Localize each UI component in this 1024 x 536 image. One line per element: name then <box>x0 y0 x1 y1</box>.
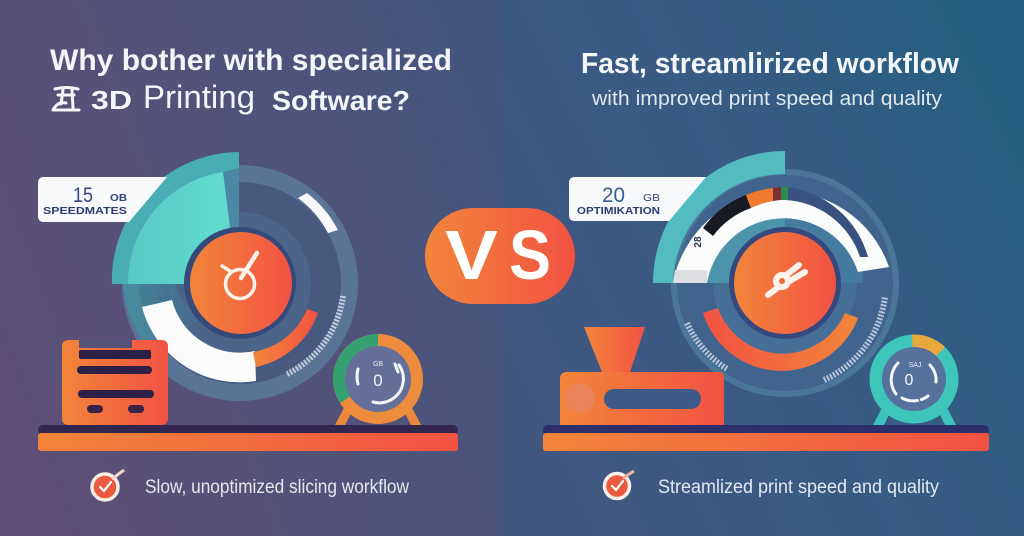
white gauge arc <box>673 191 889 283</box>
badge: VS: S <box>509 216 551 294</box>
icon: wrench <box>768 265 805 295</box>
gauge: right dial <box>653 151 899 397</box>
caption: left with check icon <box>92 470 409 500</box>
callout: left stat label: 15 <box>73 184 93 207</box>
callout: right stat label: 20 <box>602 184 625 207</box>
teal sector <box>112 152 239 284</box>
micro text ring <box>287 296 343 374</box>
badge: VS <box>425 208 575 304</box>
title: left heading: 3D <box>91 85 132 115</box>
callout: right stat label <box>569 177 706 221</box>
caption: right with check icon: Streamlized print speed and quality <box>658 477 939 498</box>
title: left heading: Software? <box>272 85 410 116</box>
icon: right printer <box>560 327 724 425</box>
title: right heading: Fast, streamlirized workflow <box>581 48 959 80</box>
orange arc <box>253 309 318 367</box>
gauge: left dial <box>112 152 358 401</box>
icon: left small gauge: 0 <box>373 371 383 390</box>
gauge track dark <box>785 187 868 257</box>
title: right heading <box>581 48 959 110</box>
icon: left printer <box>62 340 168 425</box>
icon: right small gauge: 0 <box>905 372 914 389</box>
white arc lower left <box>142 300 256 382</box>
teal sector <box>653 151 785 283</box>
title: left heading: Printing <box>143 79 255 115</box>
background: right panel <box>500 0 1024 536</box>
icon: right target check <box>604 471 634 498</box>
icon: right small gauge <box>870 334 958 425</box>
title: left heading: Why bother with specialized <box>50 44 452 77</box>
white arc upper right <box>298 193 338 233</box>
dial centre <box>184 227 296 339</box>
orange arc <box>703 308 858 371</box>
callout: left stat label <box>38 177 167 222</box>
icon: left small gauge <box>333 334 423 425</box>
icon: stopwatch <box>222 253 257 298</box>
badge: VS: V <box>445 216 498 294</box>
icon: left small gauge: GB <box>373 361 383 368</box>
callout: left stat label: OB <box>110 192 127 204</box>
icon: 3D printer spool <box>53 88 79 110</box>
title: left heading <box>50 44 452 116</box>
dial centre <box>729 227 841 339</box>
title: right heading: with improved print speed and quality <box>591 88 942 110</box>
micro text rings <box>824 296 885 380</box>
caption: right with check icon <box>604 471 939 498</box>
icon: left target check <box>92 470 124 500</box>
callout: left stat label: SPEEDMATES <box>43 205 127 217</box>
icon: right small gauge: SAJ <box>909 362 921 369</box>
callout: right stat label: OPTIMIKATION <box>577 205 660 217</box>
caption: left with check icon: Slow, unoptimized slicing workflow <box>145 477 409 498</box>
shelf: left <box>38 425 458 451</box>
callout: right stat label: GB <box>643 192 660 204</box>
gauge tick label: 28 <box>693 236 704 248</box>
shelf: right <box>543 425 989 451</box>
background: left panel <box>0 0 500 536</box>
